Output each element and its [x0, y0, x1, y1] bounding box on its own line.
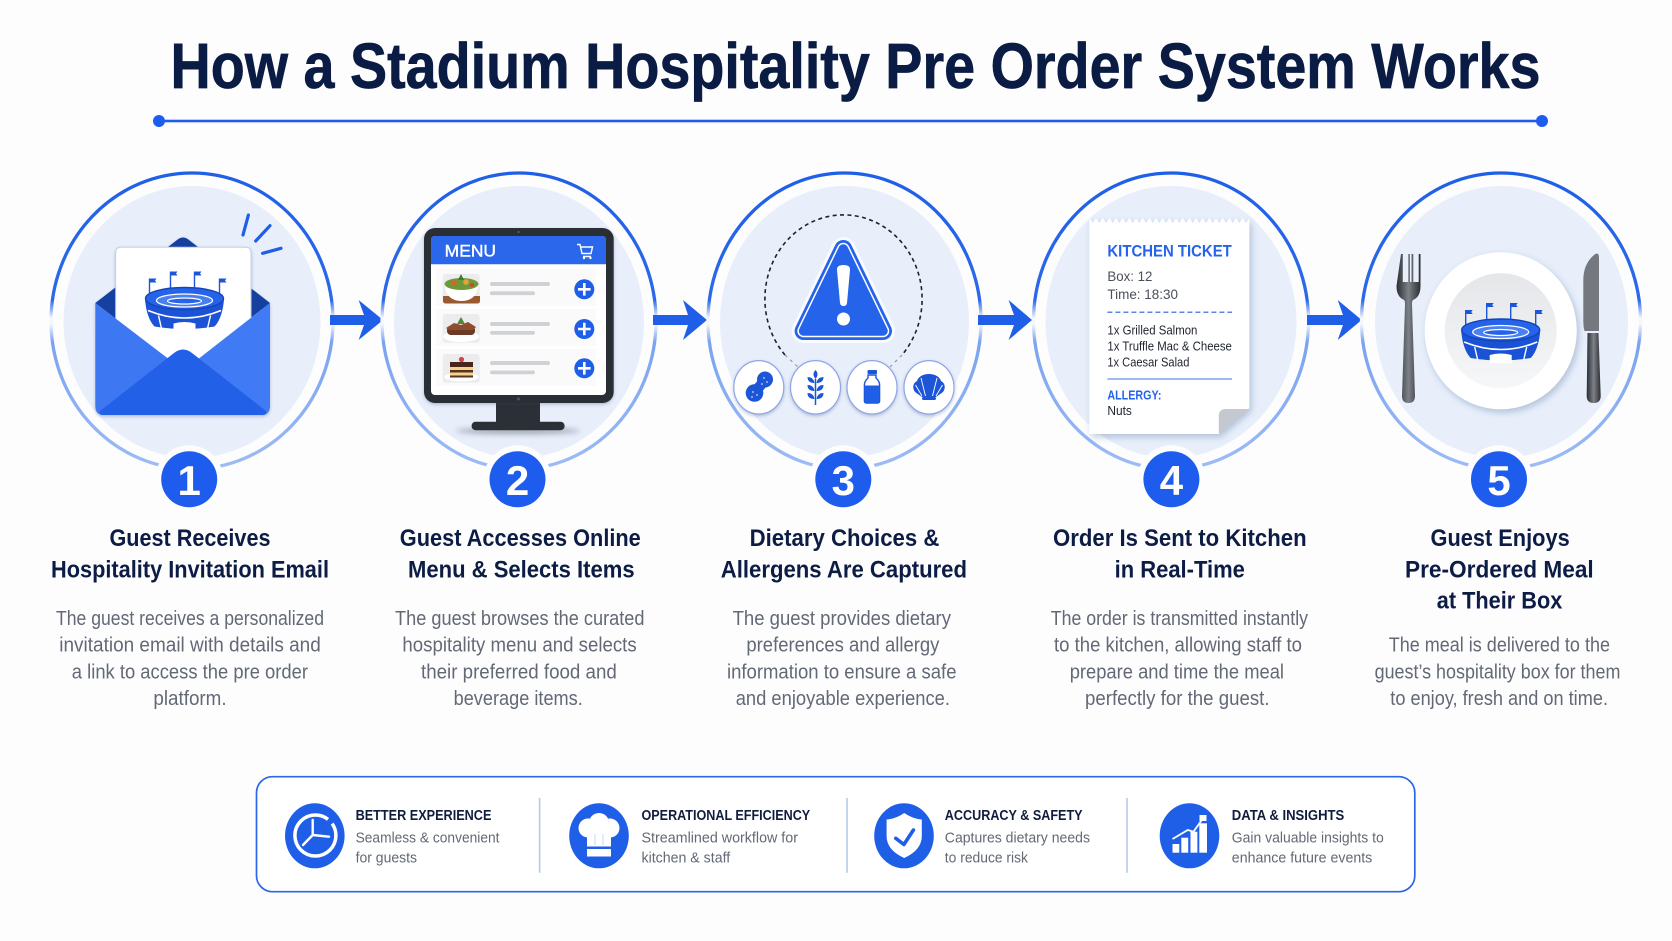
benefit: operational efficiency — [569, 803, 810, 868]
icon: wheat allergen — [790, 361, 840, 414]
benefit: operational efficiency: Streamlined workflow for — [642, 830, 798, 847]
icon: milk allergen — [847, 361, 897, 414]
description 4: to the kitchen, allowing staff to — [1054, 634, 1302, 657]
description 5: guest’s hospitality box for them — [1375, 660, 1620, 683]
benefit: data and insights — [1160, 803, 1384, 868]
kitchen ticket: Time: 18:30 — [1107, 286, 1178, 302]
benefit: better experience: for guests — [356, 849, 417, 866]
icon: knife — [1583, 254, 1601, 403]
description 4 — [1051, 607, 1309, 710]
icon: shellfish allergen — [904, 361, 954, 414]
icon: chef hat — [569, 803, 629, 868]
benefit: better experience — [285, 803, 500, 868]
badge 4 — [1137, 445, 1205, 513]
badge 1: 1 — [178, 457, 201, 504]
heading 2 — [400, 525, 641, 584]
benefit: data and insights: Gain valuable insights to — [1232, 830, 1384, 847]
steak thumbnail — [443, 314, 480, 343]
arrow 2 to 3 — [653, 300, 707, 340]
cake thumbnail — [443, 354, 480, 383]
step 2: online menu — [382, 173, 656, 710]
kitchen ticket — [1089, 218, 1249, 434]
heading 3 — [721, 525, 967, 584]
step 1 circle — [51, 173, 333, 469]
heading 4 — [1053, 525, 1307, 584]
benefit: operational efficiency: OPERATIONAL EFFICIENCY — [642, 808, 810, 824]
benefit: accuracy and safety — [874, 803, 1090, 868]
icon: monitor with menu — [424, 228, 614, 434]
step 4: order sent to kitchen — [1034, 173, 1309, 710]
benefit: accuracy and safety: Captures dietary needs — [945, 830, 1090, 847]
kitchen ticket: 1x Grilled Salmon — [1107, 324, 1197, 338]
description 1: platform. — [153, 687, 227, 710]
description 3: and enjoyable experience. — [736, 687, 950, 710]
badge 2: 2 — [506, 457, 529, 504]
arrow 3 to 4 — [978, 300, 1032, 340]
description 5: to enjoy, fresh and on time. — [1390, 687, 1608, 710]
step 2 circle — [382, 173, 656, 469]
benefit: better experience: BETTER EXPERIENCE — [356, 808, 492, 824]
benefit: accuracy and safety: to reduce risk — [945, 849, 1028, 866]
icon: clock — [285, 803, 345, 868]
heading 1 — [51, 525, 329, 584]
description 2: The guest browses the curated — [395, 607, 644, 630]
heading 2: Guest Accesses Online — [400, 525, 641, 552]
icon: peanut allergen — [734, 361, 784, 414]
description 1: a link to access the pre order — [72, 660, 308, 683]
description 4: prepare and time the meal — [1070, 660, 1284, 683]
description 2: hospitality menu and selects — [402, 634, 637, 657]
icon: warning triangle — [804, 249, 883, 331]
icon: bar chart — [1160, 803, 1219, 868]
icon: fork — [1397, 254, 1421, 403]
description 1: The guest receives a personalized — [56, 607, 324, 630]
description 2: beverage items. — [454, 687, 583, 710]
arrow 4 to 5 — [1307, 300, 1362, 340]
step 4 circle — [1034, 173, 1308, 469]
arrow 1 to 2 — [330, 300, 383, 340]
description 2 — [395, 607, 644, 710]
heading 4: Order Is Sent to Kitchen — [1053, 525, 1307, 552]
panel: benefits — [256, 777, 1415, 892]
kitchen ticket: KITCHEN TICKET — [1107, 243, 1232, 261]
heading 5: Pre-Ordered Meal — [1405, 556, 1594, 584]
heading 1: Guest Receives — [110, 525, 270, 552]
step 1: guest receives invitation email — [51, 173, 333, 710]
icon: envelope with stadium letter — [95, 238, 270, 415]
description 4: perfectly for the guest. — [1085, 687, 1270, 710]
benefit: accuracy and safety: ACCURACY & SAFETY — [945, 808, 1083, 824]
icon: shield — [874, 803, 934, 868]
icon: plate with stadium — [1425, 252, 1577, 409]
kitchen ticket: ALLERGY: — [1107, 388, 1161, 402]
badge 5 — [1465, 445, 1533, 513]
description 1 — [56, 607, 324, 710]
description 3 — [727, 607, 956, 710]
badge 3 — [809, 445, 877, 513]
benefit: operational efficiency: kitchen & staff — [642, 849, 731, 866]
heading 1: Hospitality Invitation Email — [51, 556, 329, 584]
step 3 circle — [708, 173, 981, 469]
step 5: guest enjoys meal — [1362, 173, 1640, 710]
salad thumbnail — [443, 274, 480, 304]
badge 5: 5 — [1487, 457, 1511, 504]
step 3: dietary choices and allergens — [708, 173, 981, 710]
description 4: The order is transmitted instantly — [1051, 607, 1309, 630]
title underline — [153, 115, 1548, 127]
description 3: The guest provides dietary — [733, 607, 952, 630]
benefit: data and insights: enhance future events — [1232, 849, 1372, 866]
heading 5: Guest Enjoys — [1430, 525, 1570, 552]
benefit: data and insights: DATA & INSIGHTS — [1232, 808, 1345, 824]
description 3: preferences and allergy — [746, 634, 940, 657]
heading 3: Allergens Are Captured — [721, 556, 967, 584]
kitchen ticket: Box: 12 — [1107, 268, 1153, 284]
heading 4: in Real-Time — [1115, 556, 1245, 584]
description 3: information to ensure a safe — [727, 660, 956, 683]
badge 2 — [484, 445, 552, 513]
description 2: their preferred food and — [421, 660, 617, 683]
badge 4: 4 — [1160, 457, 1184, 504]
description 5 — [1375, 634, 1620, 710]
description 1: invitation email with details and — [59, 634, 321, 657]
kitchen ticket: 1x Caesar Salad — [1107, 356, 1189, 370]
description 5: The meal is delivered to the — [1389, 634, 1610, 657]
icon: notification ticks — [243, 215, 281, 253]
benefit: better experience: Seamless & convenient — [356, 830, 500, 847]
badge 3: 3 — [832, 457, 855, 504]
step 5 circle — [1362, 173, 1640, 469]
heading 3: Dietary Choices & — [750, 525, 939, 552]
kitchen ticket: Nuts — [1107, 404, 1132, 418]
icon: monitor with menu: MENU — [445, 242, 496, 261]
heading 5: at Their Box — [1437, 588, 1563, 614]
kitchen ticket: 1x Truffle Mac & Cheese — [1107, 340, 1232, 354]
heading 5 — [1405, 525, 1594, 614]
heading 2: Menu & Selects Items — [408, 556, 635, 584]
dashed orbit — [765, 215, 922, 367]
badge 1 — [155, 445, 223, 513]
